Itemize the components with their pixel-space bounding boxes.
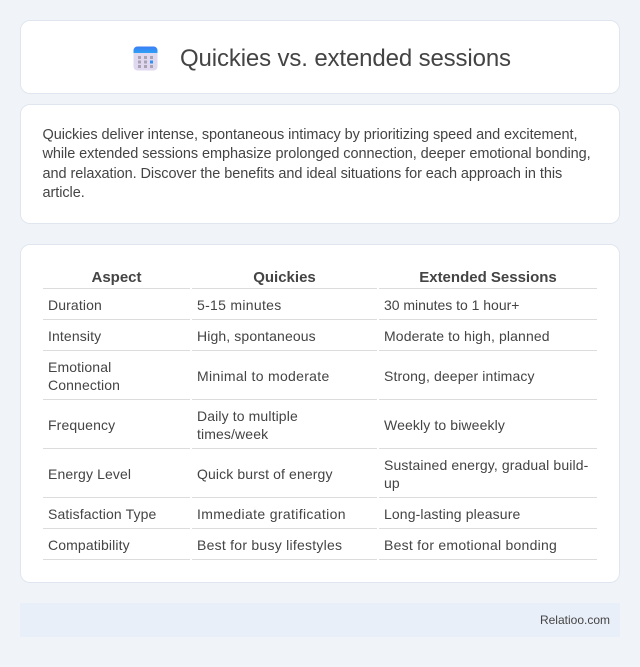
- row: compatibility: Compatibility: [48, 537, 130, 553]
- header panel: [20, 20, 620, 94]
- comparison table: Strong, deeper intimacy: [384, 368, 535, 384]
- comparison table: Minimal to moderate: [197, 368, 330, 384]
- row: satisfaction type: [48, 506, 520, 522]
- comparison table: 5-15 minutes: [197, 297, 282, 313]
- row: emotional connection: [48, 359, 535, 393]
- row: duration: [48, 297, 519, 313]
- table header: Quickies: [253, 269, 316, 286]
- intro text: Quickies deliver intense, spontaneous intimacy by prioritizing speed and excitement,: [42, 127, 577, 143]
- comparison table: up: [384, 475, 400, 491]
- row: frequency: Frequency: [48, 417, 115, 433]
- row: emotional connection: Emotional: [48, 359, 111, 375]
- comparison table: Best for busy lifestyles: [197, 537, 342, 553]
- footer bar: [20, 603, 620, 637]
- row: satisfaction type: Satisfaction Type: [48, 506, 156, 522]
- comparison table: Daily to multiple: [197, 408, 298, 424]
- intro text: while extended sessions emphasize prolonged connection, deeper emotional bonding,: [42, 146, 591, 162]
- comparison table: [43, 269, 597, 560]
- row: duration: Duration: [48, 297, 102, 313]
- table header: [91, 269, 557, 286]
- comparison table: Sustained energy, gradual build-: [384, 457, 588, 473]
- row: frequency: [48, 408, 505, 442]
- comparison table: Immediate gratification: [197, 506, 346, 522]
- comparison table: Weekly to biweekly: [384, 417, 505, 433]
- comparison table: times/week: [197, 426, 268, 442]
- comparison table: Long-lasting pleasure: [384, 506, 520, 522]
- intro text: article.: [42, 185, 85, 201]
- intro panel: [20, 104, 620, 224]
- comparison table: 30 minutes to 1 hour+: [384, 297, 519, 313]
- row: emotional connection: Connection: [48, 377, 120, 393]
- comparison table: Moderate to high, planned: [384, 328, 550, 344]
- icon: calendar: [134, 46, 158, 70]
- table panel: [20, 244, 620, 583]
- table header: Aspect: [91, 269, 142, 286]
- intro text: [42, 127, 591, 201]
- intro text: and relaxation. Discover the benefits and ideal situations for each approach in this: [42, 166, 562, 182]
- row: energy level: Energy Level: [48, 466, 131, 482]
- title: Quickies vs. extended sessions: [180, 45, 511, 72]
- comparison table: Best for emotional bonding: [384, 537, 557, 553]
- row: intensity: [48, 328, 550, 344]
- row: compatibility: [48, 537, 557, 553]
- row: intensity: Intensity: [48, 328, 101, 344]
- comparison table: Quick burst of energy: [197, 466, 333, 482]
- table header: Extended Sessions: [419, 269, 557, 286]
- comparison table: High, spontaneous: [197, 328, 316, 344]
- row: energy level: [48, 457, 588, 491]
- footer credit: Relatioo.com: [540, 613, 610, 627]
